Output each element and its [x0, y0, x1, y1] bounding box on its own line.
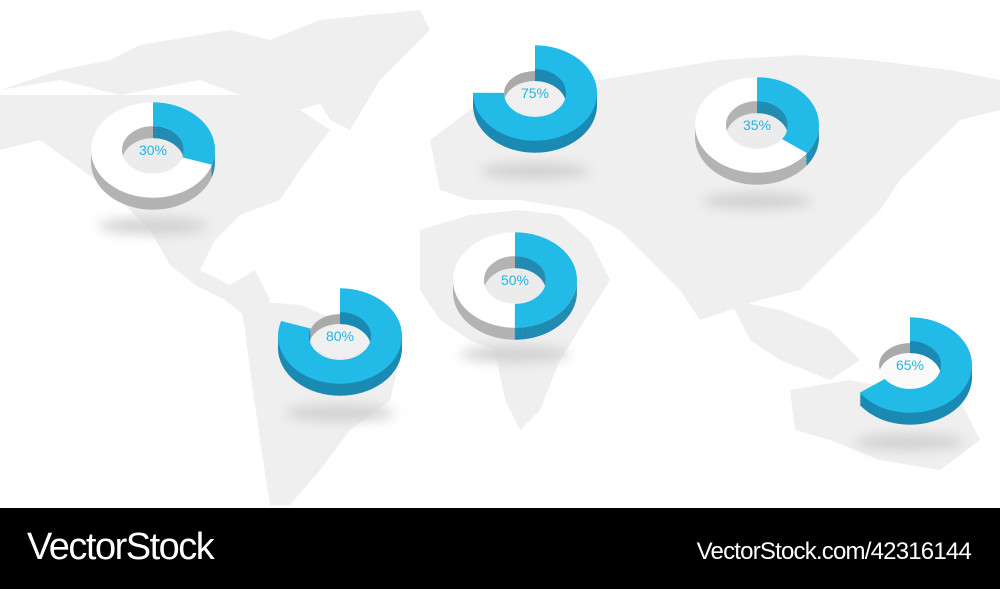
footer url text: VectorStock.com/42316144 [697, 538, 971, 565]
label: 50%: 50% [501, 272, 529, 288]
label: 65%: 65% [896, 357, 924, 373]
donut: 35% [702, 89, 812, 209]
label: 75%: 75% [521, 85, 549, 101]
donut: 30% [98, 114, 208, 234]
donut: 80% [285, 300, 395, 421]
donut: 75% [480, 57, 590, 179]
label: 80%: 80% [326, 328, 354, 344]
donut: 50% [460, 244, 570, 362]
footer bar [0, 508, 1000, 589]
footer logo text: VectorStock [27, 526, 213, 568]
label: 30%: 30% [139, 142, 167, 158]
label: 35%: 35% [743, 117, 771, 133]
donut: 65% [855, 329, 965, 450]
